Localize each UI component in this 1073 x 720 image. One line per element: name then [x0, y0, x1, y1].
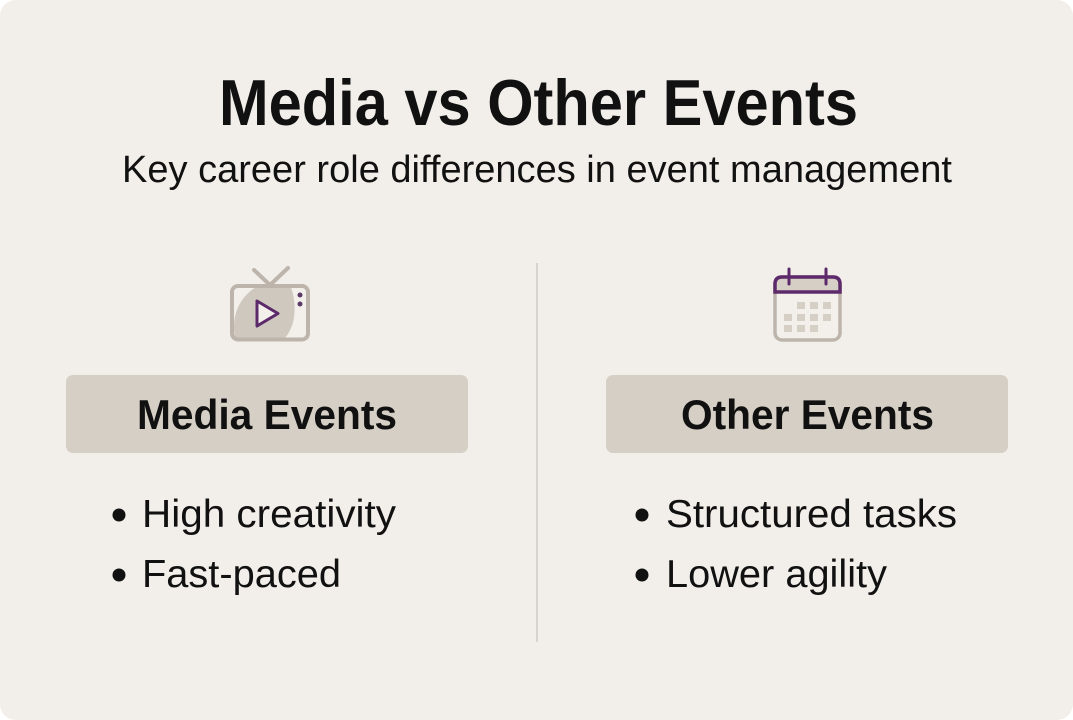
subtitle: Key career role differences in event management: [122, 149, 952, 191]
panel: media events: [66, 268, 468, 596]
heading box: other events: [606, 375, 1008, 453]
title: Media vs Other Events: [219, 66, 858, 139]
list: media events: High creativity: [142, 493, 397, 536]
heading box: other events: Other Events: [681, 391, 934, 438]
list: media events: Fast-paced: [142, 553, 341, 596]
panel: other events: [606, 269, 1008, 596]
heading box: media events: [66, 375, 468, 453]
list: other events: [636, 493, 957, 596]
heading box: media events: Media Events: [137, 391, 397, 438]
icon: television: [232, 268, 308, 340]
list: other events: Structured tasks: [666, 493, 957, 536]
list: media events: [112, 493, 397, 596]
icon: calendar: [775, 269, 840, 340]
list: other events: Lower agility: [666, 553, 887, 596]
